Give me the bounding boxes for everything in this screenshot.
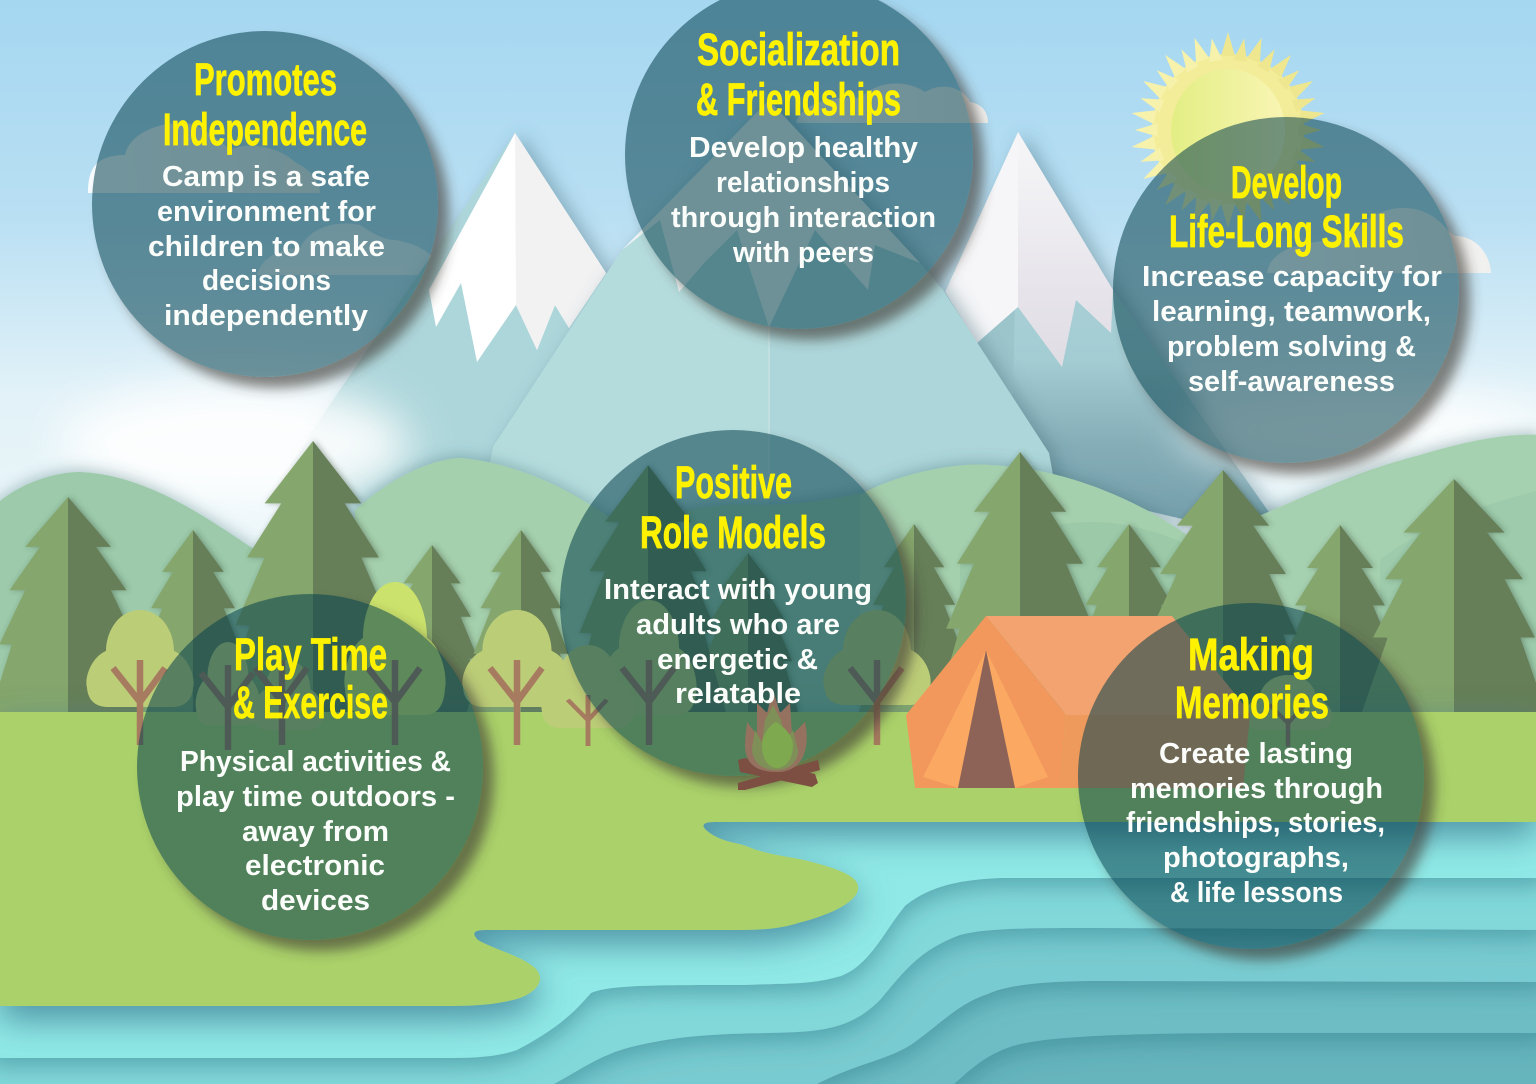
water layer 2 [0, 800, 1536, 1084]
panel: Play Time & Exercise [137, 594, 483, 940]
heading: Socialization & Friendships [696, 24, 901, 125]
text: play time description: away from [242, 816, 389, 848]
pine trees [0, 441, 1536, 714]
text: socialization description: with peers [732, 237, 874, 269]
text: socialization description: Develop healthy [689, 132, 918, 164]
text: play time description [176, 746, 455, 917]
text: play time description: play time outdoors - [176, 781, 455, 813]
text: independence description: children to make [148, 231, 385, 263]
text: role models description [604, 574, 872, 710]
text: socialization description: relationships [716, 167, 890, 199]
heading: Positive Role Models: Positive [675, 457, 792, 508]
text: skills description: problem solving & [1167, 331, 1416, 363]
panel: Socialization & Friendships [625, 0, 973, 329]
cloud left [88, 123, 320, 193]
heading: Develop Life-Long Skills: Life-Long Skills [1169, 206, 1404, 257]
text: independence description: Camp is a safe [162, 161, 370, 193]
text: independence description: independently [164, 300, 368, 332]
heading: Making Memories: Memories [1175, 677, 1329, 728]
text: role models description: Interact with young [604, 574, 872, 606]
cloud center [796, 83, 988, 123]
green shoreline [0, 712, 1536, 1006]
text: role models description: relatable [675, 678, 801, 710]
water layer 1 [0, 800, 1536, 1058]
fog left [60, 383, 410, 507]
text: independence description [148, 161, 385, 332]
icon: sun [1130, 32, 1326, 228]
heading: Socialization & Friendships: Socialization [697, 24, 900, 75]
cloud lower left [257, 224, 445, 275]
panel: Positive Role Models [560, 430, 906, 790]
panel: Promotes Independence [92, 31, 438, 377]
heading: Develop Life-Long Skills [1169, 157, 1404, 257]
panel: Develop Life-Long Skills [1113, 117, 1459, 463]
sky background [0, 0, 1536, 720]
text: role models description: energetic & [657, 644, 818, 676]
text: play time description: devices [261, 885, 370, 917]
text: independence description: decisions [202, 265, 331, 297]
text: skills description: Increase capacity for [1142, 261, 1442, 293]
cloud right [1267, 208, 1491, 273]
text: memories description: Create lasting [1159, 738, 1353, 770]
mountain: center [470, 100, 1070, 570]
text: role models description: adults who are [636, 609, 840, 641]
text: memories description: friendships, stories, [1126, 807, 1385, 839]
mountain: right [850, 132, 1292, 545]
text: play time description: electronic [245, 850, 385, 882]
text: memories description: memories through [1130, 773, 1383, 805]
heading: Socialization & Friendships: & Friendships [696, 74, 901, 125]
water layer 5 [0, 900, 1536, 1084]
heading: Making Memories [1175, 629, 1329, 728]
heading: Play Time & Exercise [233, 629, 388, 728]
heading: Play Time & Exercise: Play Time [234, 629, 387, 680]
heading: Promotes Independence: Promotes [194, 54, 337, 105]
hills [0, 435, 1536, 720]
heading: Play Time & Exercise: & Exercise [233, 677, 388, 728]
text: memories description: photographs, [1163, 842, 1349, 874]
round trees [86, 582, 1333, 730]
text: memories description [1126, 738, 1385, 909]
tent [906, 616, 1252, 788]
text: play time description: Physical activities & [180, 746, 451, 778]
heading: Positive Role Models [640, 457, 826, 558]
fog right [1180, 390, 1536, 470]
mountain: left [290, 133, 820, 560]
text: independence description: environment for [157, 196, 376, 228]
water layer 3 [0, 800, 1536, 1084]
text: skills description: learning, teamwork, [1152, 296, 1431, 328]
icon: campfire [738, 690, 820, 790]
panel: Making Memories [1078, 603, 1424, 949]
text: skills description: self-awareness [1188, 366, 1395, 398]
heading: Develop Life-Long Skills: Develop [1231, 157, 1342, 208]
text: skills description [1142, 261, 1442, 398]
water layer 4 [0, 800, 1536, 1084]
heading: Making Memories: Making [1188, 629, 1314, 680]
heading: Promotes Independence: Independence [163, 104, 367, 155]
tree trunks [113, 660, 1306, 750]
text: socialization description: through interaction [671, 202, 936, 234]
heading: Promotes Independence [163, 54, 367, 155]
heading: Positive Role Models: Role Models [640, 507, 826, 558]
text: memories description: & life lessons [1170, 877, 1343, 909]
text: socialization description [671, 132, 936, 269]
